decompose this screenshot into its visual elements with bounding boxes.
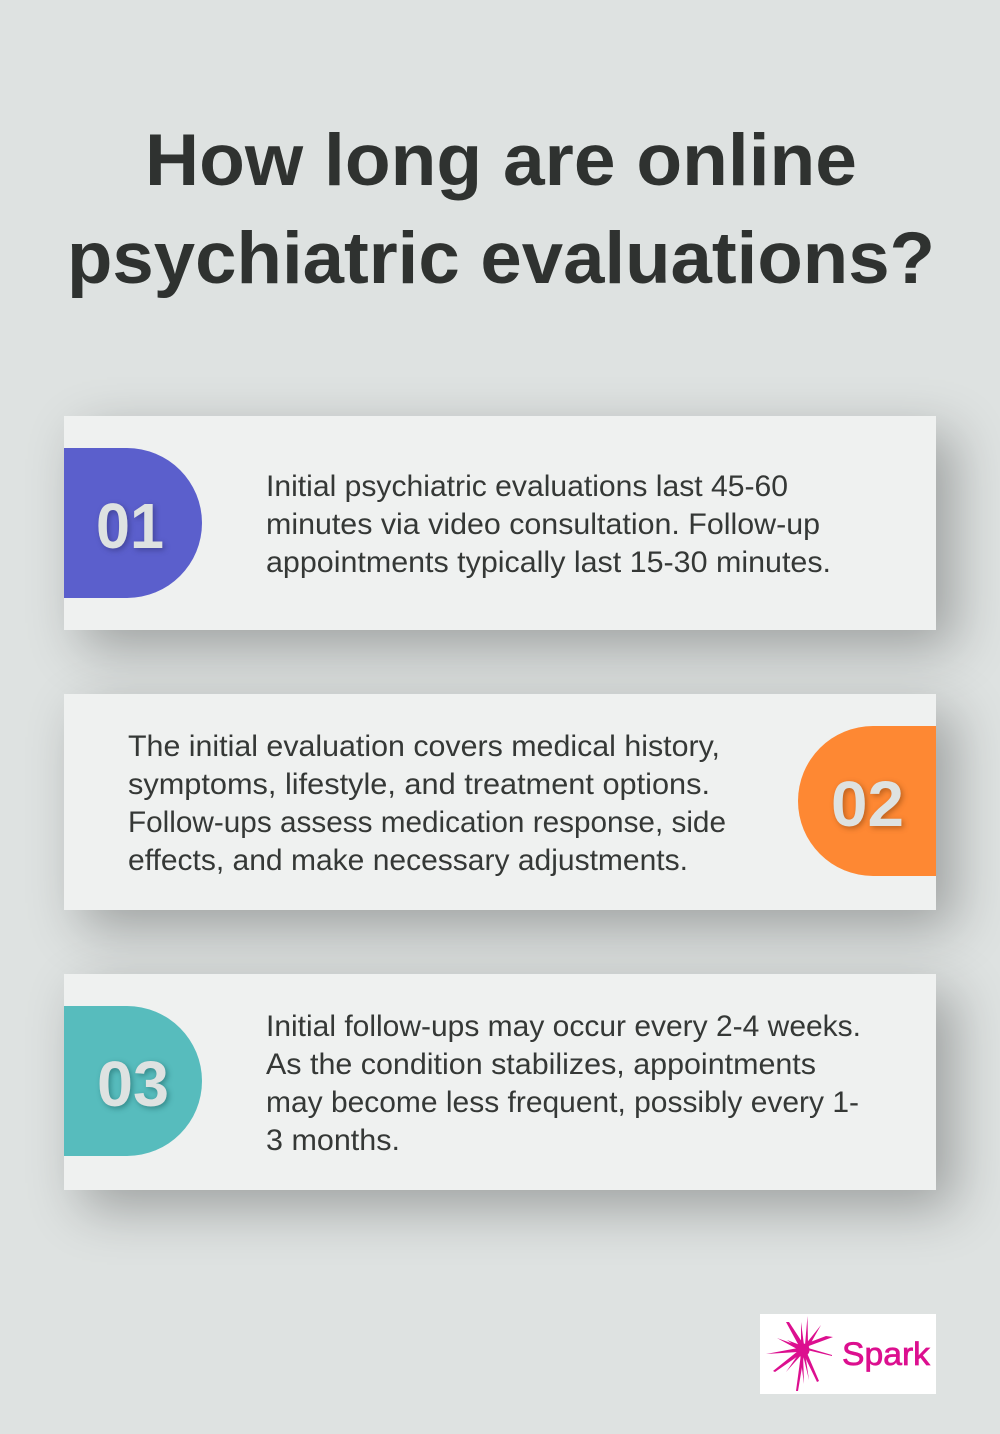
title: [67, 120, 935, 299]
title: How long are online: [145, 120, 857, 201]
badge: 03: [64, 1006, 202, 1156]
text: step 03 description: [266, 1010, 861, 1157]
text: step 03 description: Initial follow-ups may occur every 2-4 weeks.: [266, 1010, 861, 1043]
badge: 02: 02: [831, 768, 904, 840]
text: step 02 description: symptoms, lifestyle, and treatment options.: [128, 768, 710, 801]
text: step 01 description: minutes via video consultation. Follow-up: [266, 508, 820, 541]
panel: step 03: [64, 974, 936, 1190]
text: step 02 description: effects, and make necessary adjustments.: [128, 844, 688, 877]
icon: starburst: [766, 1316, 931, 1391]
text: step 02 description: [128, 730, 726, 877]
text: step 03 description: may become less frequent, possibly every 1-: [266, 1086, 859, 1119]
text: step 02 description: The initial evaluation covers medical history,: [128, 730, 720, 763]
text: step 03 description: As the condition stabilizes, appointments: [266, 1048, 816, 1081]
icon: starburst: Spark: [842, 1336, 931, 1372]
logo: Spark: [760, 1314, 936, 1394]
badge: 03: 03: [97, 1048, 169, 1120]
panel: step 02: [64, 694, 936, 910]
badge: 02: [798, 726, 936, 876]
panel: step 01: [64, 416, 936, 630]
title: psychiatric evaluations?: [67, 218, 935, 299]
text: step 02 description: Follow-ups assess medication response, side: [128, 806, 726, 839]
text: step 03 description: 3 months.: [266, 1124, 400, 1157]
badge: 01: [64, 448, 202, 598]
text: step 01 description: [266, 470, 831, 579]
text: step 01 description: appointments typically last 15-30 minutes.: [266, 546, 831, 579]
text: step 01 description: Initial psychiatric evaluations last 45-60: [266, 470, 788, 503]
badge: 01: 01: [96, 490, 164, 562]
